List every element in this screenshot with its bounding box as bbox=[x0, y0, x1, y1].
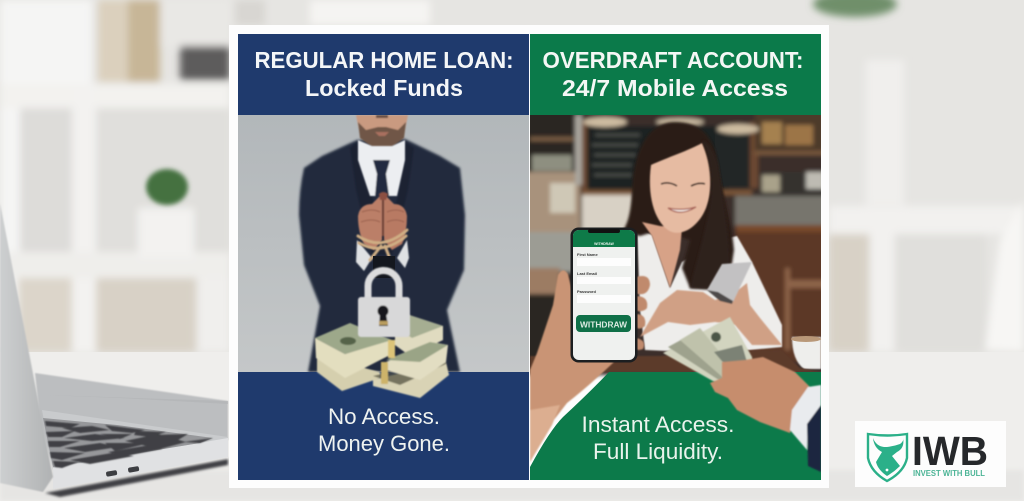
face and beard bbox=[356, 115, 408, 147]
bundle: top left bbox=[315, 338, 390, 378]
woman's hands and phone bbox=[640, 262, 782, 345]
phone: withdraw screen: Last Email bbox=[577, 271, 597, 276]
heading: regular home loan bbox=[238, 34, 529, 115]
shirt and tie bbox=[358, 140, 405, 196]
front hair strand bbox=[690, 140, 730, 290]
bundle: lower left bbox=[317, 356, 380, 391]
icon: potted plant bbox=[146, 169, 188, 205]
left hand holding phone bbox=[530, 270, 650, 462]
icon: bull shield bbox=[868, 434, 907, 481]
heading: overdraft account: 24/7 Mobile Access bbox=[562, 75, 788, 101]
right hand with cuff bbox=[710, 357, 821, 472]
suit bbox=[299, 139, 465, 372]
heading: regular home loan: REGULAR HOME LOAN: bbox=[254, 47, 514, 73]
heading: overdraft account bbox=[530, 34, 821, 115]
bottom text: Full Liquidity. bbox=[593, 439, 723, 464]
phone: withdraw screen: First Name bbox=[577, 252, 598, 257]
table bbox=[530, 350, 821, 372]
logo: IWB bbox=[855, 421, 1006, 487]
bottom band: navy: Money Gone. bbox=[318, 431, 450, 456]
logo: IWB: INVEST WITH BULL bbox=[913, 469, 985, 478]
phone: withdraw screen: Password bbox=[577, 289, 596, 294]
phone: withdraw screen bbox=[570, 228, 638, 362]
cafe background bbox=[525, 110, 826, 375]
green band with curved edge bbox=[530, 372, 821, 480]
hands bbox=[358, 192, 407, 250]
bundle: middle right bbox=[386, 342, 448, 380]
bundle: upper right bbox=[395, 312, 443, 356]
panel: regular home loan bbox=[238, 34, 529, 480]
heading: overdraft account: OVERDRAFT ACCOUNT: bbox=[542, 47, 804, 73]
padlock bbox=[358, 271, 410, 337]
bottom text bbox=[584, 416, 732, 464]
bottom band: navy bbox=[238, 372, 529, 480]
heading: regular home loan: Locked Funds bbox=[305, 75, 463, 101]
keyboard keys bbox=[45, 421, 213, 468]
blouse bbox=[637, 227, 782, 352]
bottom band: navy: No Access. bbox=[328, 404, 440, 429]
coffee cup bbox=[792, 337, 821, 369]
stacks of cash bbox=[315, 312, 449, 398]
logo: IWB: IWB bbox=[912, 428, 988, 474]
white card bbox=[229, 25, 829, 488]
photo: woman in cafe with mobile banking bbox=[525, 110, 826, 480]
panel: overdraft account bbox=[525, 34, 826, 480]
phone: withdraw screen: WITHDRAW bbox=[580, 320, 628, 330]
rope bbox=[358, 230, 407, 264]
cash fan bbox=[662, 316, 753, 382]
phone: withdraw screen: WITHDRAW bbox=[594, 242, 615, 246]
bundle: bottom right bbox=[373, 362, 449, 398]
photo: businessman with tied hands bbox=[238, 115, 529, 372]
bottom text: Instant Access. bbox=[582, 412, 734, 437]
hair back bbox=[622, 122, 734, 290]
face and neck bbox=[642, 143, 711, 288]
shirt cuffs bbox=[356, 240, 409, 271]
laptop bbox=[0, 203, 228, 497]
